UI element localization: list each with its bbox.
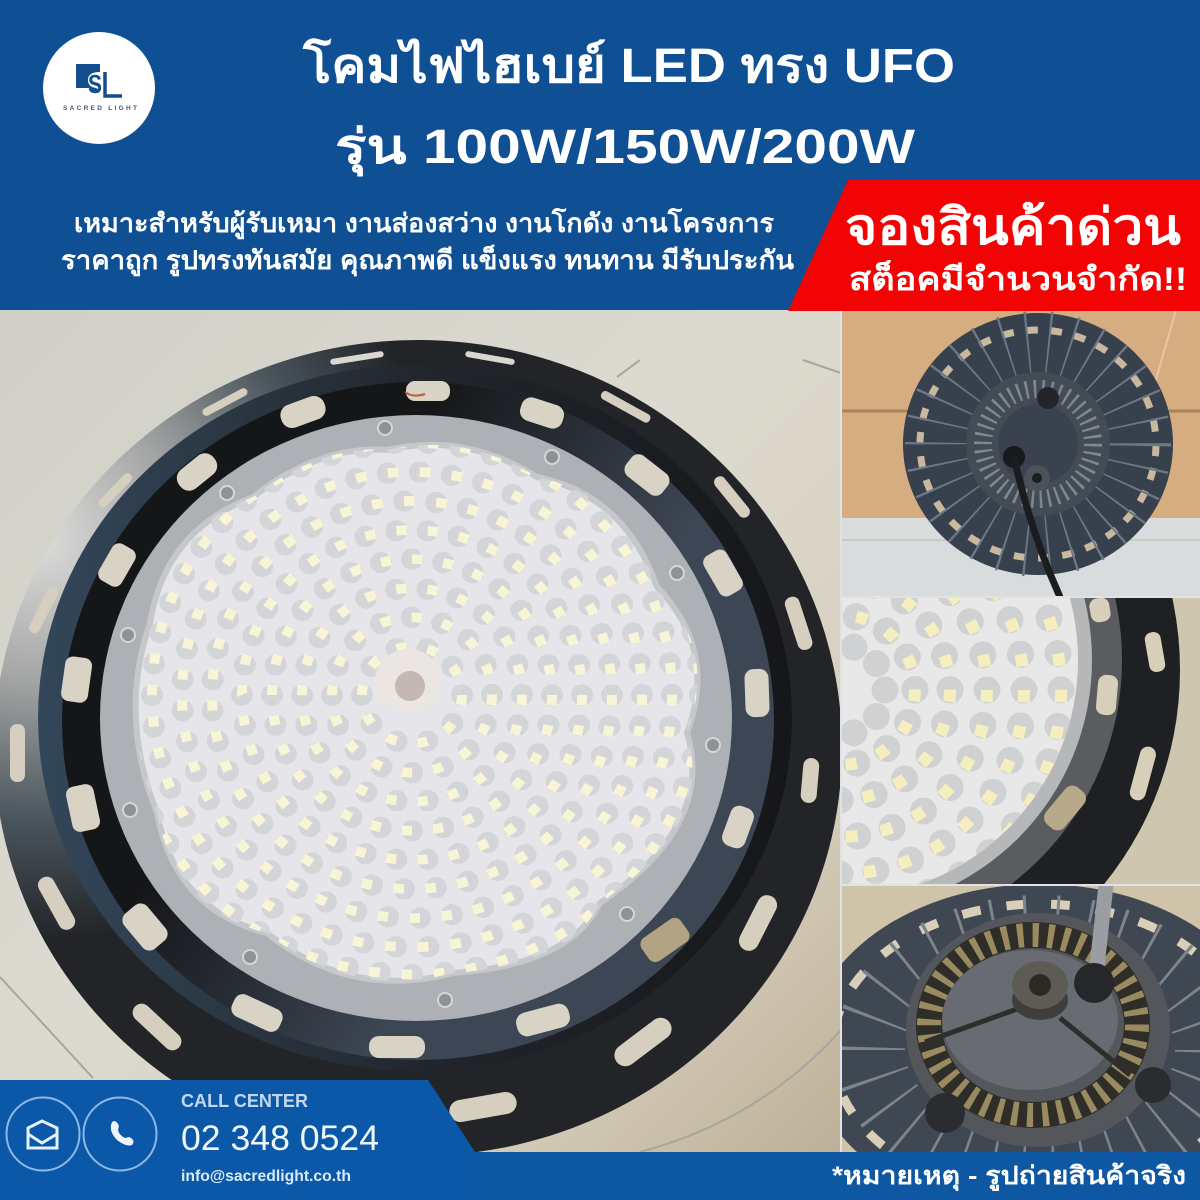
call center text [181,1091,379,1185]
description text: ราคาถูก รูปทรงทันสมัย คุณภาพดี แข็งแรง ทนทาน มีรับประกัน [61,244,794,277]
centre sensor [375,649,432,701]
description text [61,207,794,277]
title: รุ่น 100W/150W/200W [335,121,916,177]
inner band [62,382,774,1060]
outer rim [0,340,842,1156]
photo dividers [841,310,1200,1152]
lens screws [121,421,720,1007]
icon: envelope [6,1098,80,1170]
header band [0,0,1200,311]
wires [405,392,425,396]
call center text: info@sacredlight.co.th [181,1168,351,1185]
stepped ring [38,365,792,1071]
red promo banner [788,180,1200,311]
close-up slots [1040,596,1166,834]
red promo banner: จองสินค้าด่วน [845,199,1181,255]
photo: lamp back detail [842,886,1200,1152]
call center text: CALL CENTER [181,1091,308,1111]
title [302,37,955,177]
title: โคมไฟไฮเบย์ LED ทรง UFO [302,37,955,93]
bottom bar with note: *หมายเหตุ - รูปถ่ายสินค้าจริง [832,1162,1186,1192]
lens [100,415,732,1021]
LED array [124,416,700,974]
icon: phone [84,1098,156,1170]
photo: lamp back on cardboard [842,310,1200,598]
photo: LED close-up [842,598,1200,884]
inner slots [60,381,770,1058]
main photo: LED lamp front [0,310,842,1156]
description text: เหมาะสำหรับผู้รับเหมา งานส่องสว่าง งานโกดัง งานโครงการ [74,207,774,240]
logo badge [43,32,155,144]
red promo banner: สต็อคมีจำนวนจำกัด!! [849,259,1187,297]
outer slots [10,351,820,1124]
close-up LEDs [842,598,1074,884]
logo badge: SACRED LIGHT [63,105,137,112]
call center text: 02 348 0524 [181,1119,379,1158]
logo badge: S [88,69,102,99]
contact panel [0,1080,480,1200]
bottom bar with note [440,1152,1200,1200]
